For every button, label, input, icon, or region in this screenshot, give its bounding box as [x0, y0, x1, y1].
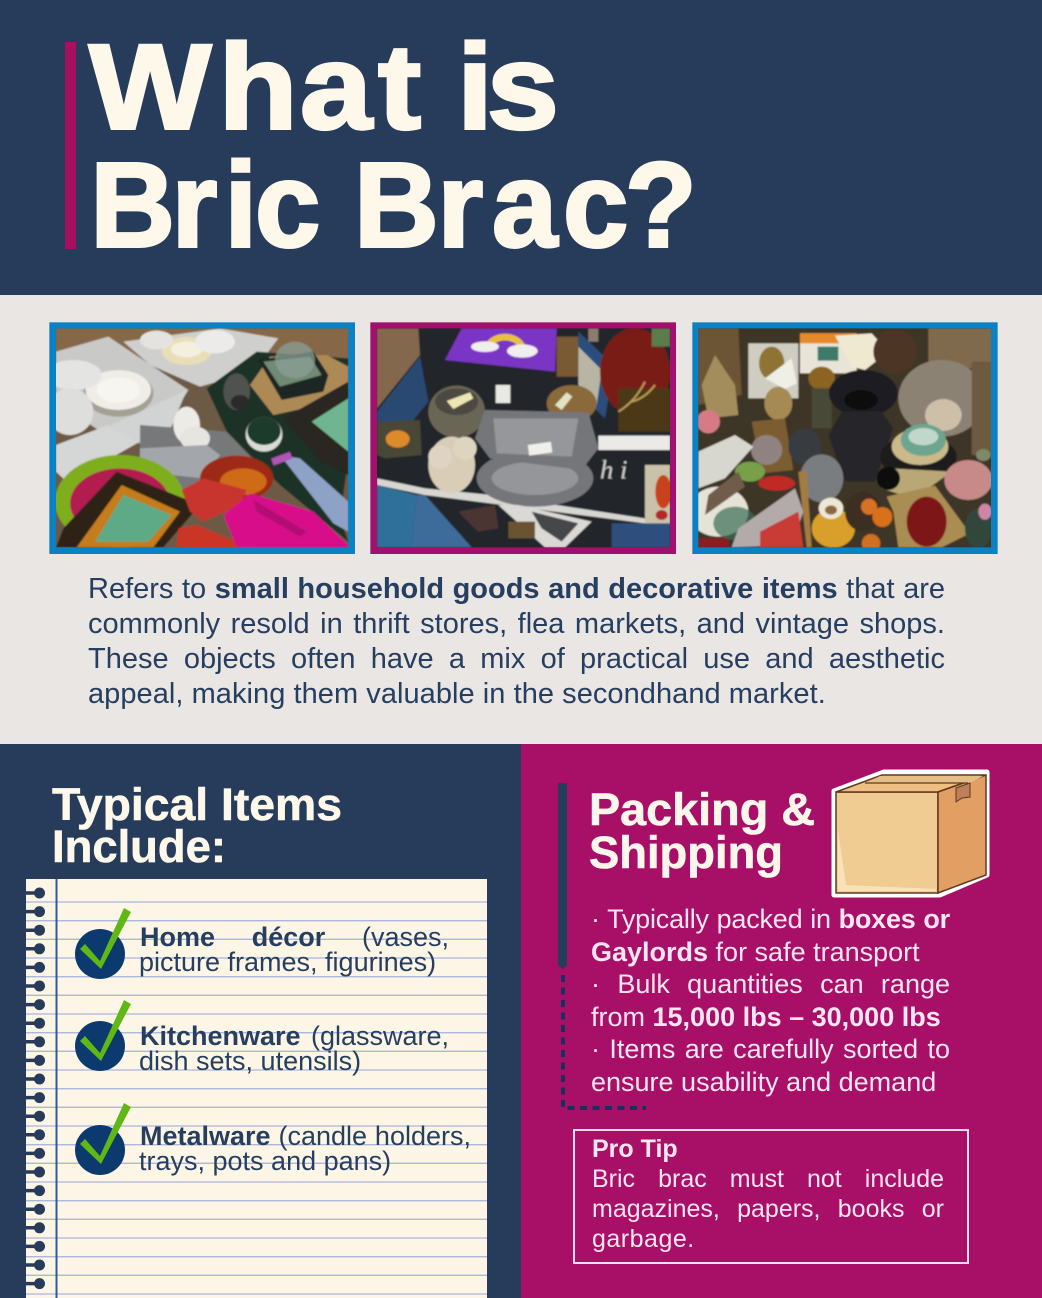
list of typical items: trays, pots and pans) [139, 1146, 391, 1176]
shipping details text [591, 904, 950, 1097]
panel: packing and shipping [521, 744, 1042, 1298]
icon: checkmark 2 [75, 1000, 131, 1071]
header band [0, 0, 1042, 295]
description paragraph: appeal, making them valuable in the secondhand market. [88, 678, 826, 710]
packing heading: Shipping [589, 827, 783, 878]
list of typical items: dish sets, utensils) [139, 1046, 361, 1076]
panel: typical items [0, 744, 521, 1298]
notebook page [26, 879, 487, 1298]
description paragraph [88, 573, 945, 710]
photo: bakeware and rainbow canvas: h i [600, 454, 627, 484]
pro tip body: magazines, papers, books or [592, 1195, 944, 1223]
title: What is [89, 19, 559, 155]
typical items heading: Typical Items [52, 779, 342, 830]
title [87, 19, 697, 273]
photo: vases and decor [692, 322, 998, 554]
title accent bar [65, 42, 76, 249]
photo: bakeware and rainbow canvas [370, 322, 676, 554]
pro tip body: garbage. [592, 1225, 695, 1253]
list of typical items: Kitchenware (glassware, [140, 1021, 449, 1051]
pro tip heading: Pro Tip [592, 1135, 678, 1163]
description paragraph: commonly resold in thrift stores, flea markets, and vintage shops. [88, 608, 945, 640]
pro tip body [592, 1165, 944, 1253]
pro tip body: Bric brac must not include [592, 1165, 944, 1193]
shipping details text: · Bulk quantities can range [591, 969, 950, 999]
packing heading: Packing & [589, 784, 815, 835]
description paragraph: These objects often have a mix of practical use and aesthetic [88, 643, 945, 675]
callout: pro tip [573, 1129, 969, 1264]
shipping details text: Gaylords for safe transport [591, 937, 920, 967]
description paragraph: Refers to small household goods and decorative items that are [88, 573, 945, 605]
shipping details text: from 15,000 lbs – 30,000 lbs [591, 1002, 941, 1032]
icon: cardboard box [832, 770, 990, 898]
packing heading [589, 784, 815, 878]
accent bar and dotted connector [558, 783, 646, 1110]
photo: dishes in plastic bins [49, 322, 355, 554]
list of typical items: Metalware (candle holders, [140, 1121, 471, 1151]
typical items heading [52, 779, 342, 872]
list of typical items: Home décor (vases, [140, 922, 449, 952]
shipping details text: · Typically packed in boxes or [591, 904, 950, 934]
list of typical items [139, 922, 471, 1176]
title: Bric Brac? [90, 138, 697, 273]
typical items heading: Include: [52, 821, 226, 872]
shipping details text: · Items are carefully sorted to [591, 1034, 950, 1064]
shipping details text: ensure usability and demand [591, 1067, 936, 1097]
icon: checkmark 1 [75, 908, 131, 979]
icon: checkmark 3 [75, 1103, 131, 1175]
list of typical items: picture frames, figurines) [139, 947, 436, 977]
notebook spiral holes [26, 888, 45, 1289]
